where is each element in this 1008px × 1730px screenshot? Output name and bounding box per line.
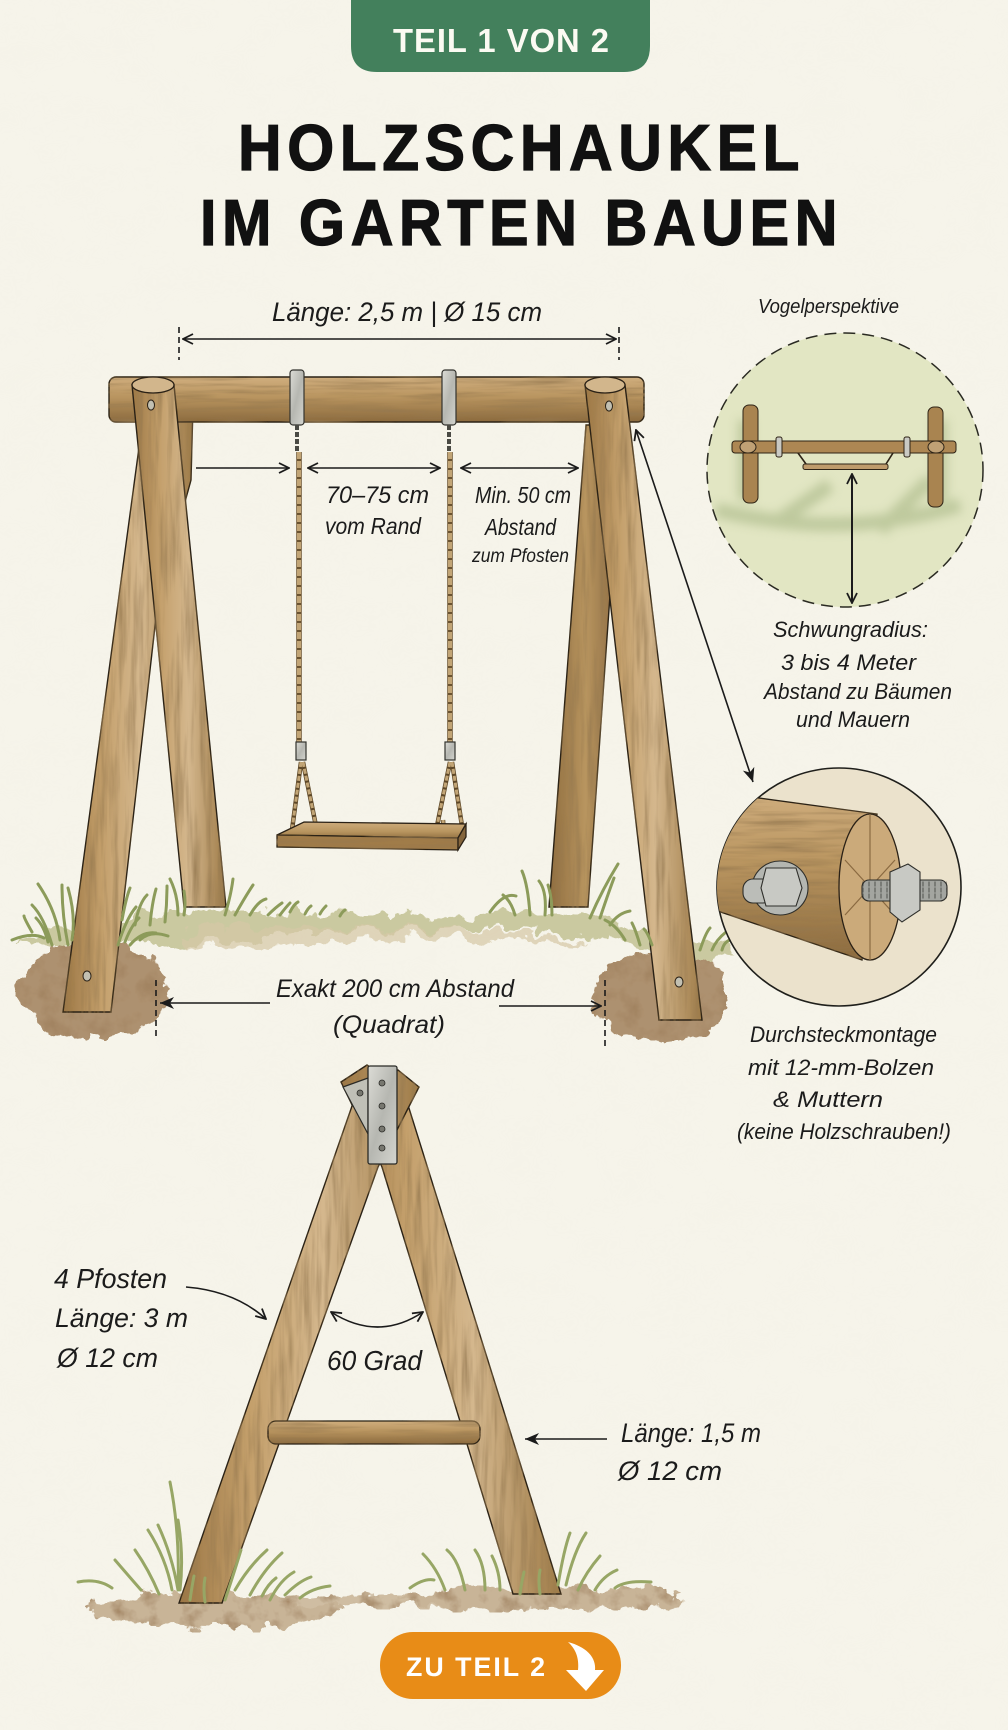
through-bolt text: [737, 1022, 951, 1144]
swing radius arrow: [851, 474, 853, 603]
swing radius text: [762, 617, 952, 732]
lawn shadows: [716, 420, 960, 530]
grass tufts: [12, 864, 730, 950]
icon: curved arrow: [566, 1642, 604, 1691]
brace label: Ø 12 cm: [617, 1456, 722, 1486]
badge: Teil 1 von 2: [351, 0, 650, 72]
ropes: [290, 452, 462, 850]
A-frame grass: [78, 1482, 651, 1602]
right leg: [341, 1065, 561, 1594]
gusset plate: [343, 1078, 368, 1134]
ground strip under swing: [15, 910, 735, 965]
button: zu Teil 2: ZU TEIL 2: [406, 1652, 547, 1682]
title: [200, 111, 843, 259]
swing frame: [63, 377, 702, 1020]
through-bolt text: & Muttern: [773, 1087, 883, 1112]
cross brace: [268, 1421, 480, 1444]
soil mound right: [592, 954, 732, 1042]
200 cm spacing dimension: Exakt 200 cm Abstand: [276, 975, 515, 1003]
right bolt: [862, 864, 947, 922]
title: IM GARTEN BAUEN: [200, 186, 843, 259]
through-bolt text: Durchsteckmontage: [750, 1022, 937, 1047]
back right post: [549, 425, 622, 907]
callout: bird's-eye view: [707, 296, 983, 607]
swing position labels: [196, 468, 578, 567]
swing position labels: Min. 50 cm: [475, 482, 571, 508]
post end left: [132, 377, 174, 393]
swing radius text: Schwungradius:: [773, 617, 928, 642]
post label: [54, 1263, 266, 1373]
title: HOLZSCHAUKEL: [238, 111, 805, 184]
through-bolt text: mit 12-mm-Bolzen: [748, 1055, 934, 1080]
beam length dimension: Länge: 2,5 m | Ø 15 cm: [272, 297, 542, 327]
swing position labels: 70–75 cm: [326, 482, 429, 509]
rope clamps: [296, 742, 455, 760]
top beam: [109, 377, 644, 422]
swing radius text: und Mauern: [796, 707, 910, 732]
hanger left: [290, 370, 304, 452]
button: zu Teil 2: [380, 1632, 621, 1699]
A-frame side view: [179, 1065, 561, 1603]
swing radius text: Abstand zu Bäumen: [762, 679, 952, 704]
callout: bird's-eye view: Vogelperspektive: [758, 296, 899, 318]
200 cm spacing dimension: [156, 975, 605, 1046]
swing: [277, 370, 466, 850]
hanger right: [442, 370, 456, 452]
arrow from post to bolt detail: [636, 430, 753, 782]
left leg: [179, 1070, 419, 1603]
seat: [277, 822, 466, 850]
left bolt: [743, 861, 808, 915]
post label: 4 Pfosten: [54, 1263, 167, 1294]
lawn circle: [707, 333, 983, 607]
callout: through-bolt detail: [700, 768, 961, 1006]
angle label: 60 Grad: [327, 1345, 423, 1376]
back left post: [63, 405, 193, 1012]
post label: Ø 12 cm: [56, 1343, 158, 1373]
brace label: [525, 1418, 761, 1486]
front left post: [132, 385, 226, 907]
through-bolt text: (keine Holzschrauben!): [737, 1119, 951, 1144]
swing position labels: vom Rand: [325, 513, 422, 539]
200 cm spacing dimension: (Quadrat): [333, 1011, 445, 1039]
soil mound left: [16, 942, 168, 1038]
badge: Teil 1 von 2: TEIL 1 VON 2: [393, 22, 610, 59]
front right post: [585, 385, 702, 1020]
post bolts: [83, 400, 683, 987]
top-down swing: [732, 405, 956, 507]
vertical metal plate: [357, 1066, 397, 1164]
brace label: Länge: 1,5 m: [621, 1418, 761, 1448]
angle label: [327, 1312, 423, 1376]
post label: Länge: 3 m: [55, 1303, 188, 1333]
swing position labels: zum Pfosten: [471, 546, 569, 567]
swing position labels: Abstand: [483, 514, 557, 540]
ground under A-frame: [90, 1587, 680, 1627]
log end: [839, 814, 901, 960]
log: [717, 798, 878, 961]
beam length dimension: [179, 297, 619, 360]
swing radius text: 3 bis 4 Meter: [781, 650, 918, 675]
post end right: [585, 377, 625, 393]
